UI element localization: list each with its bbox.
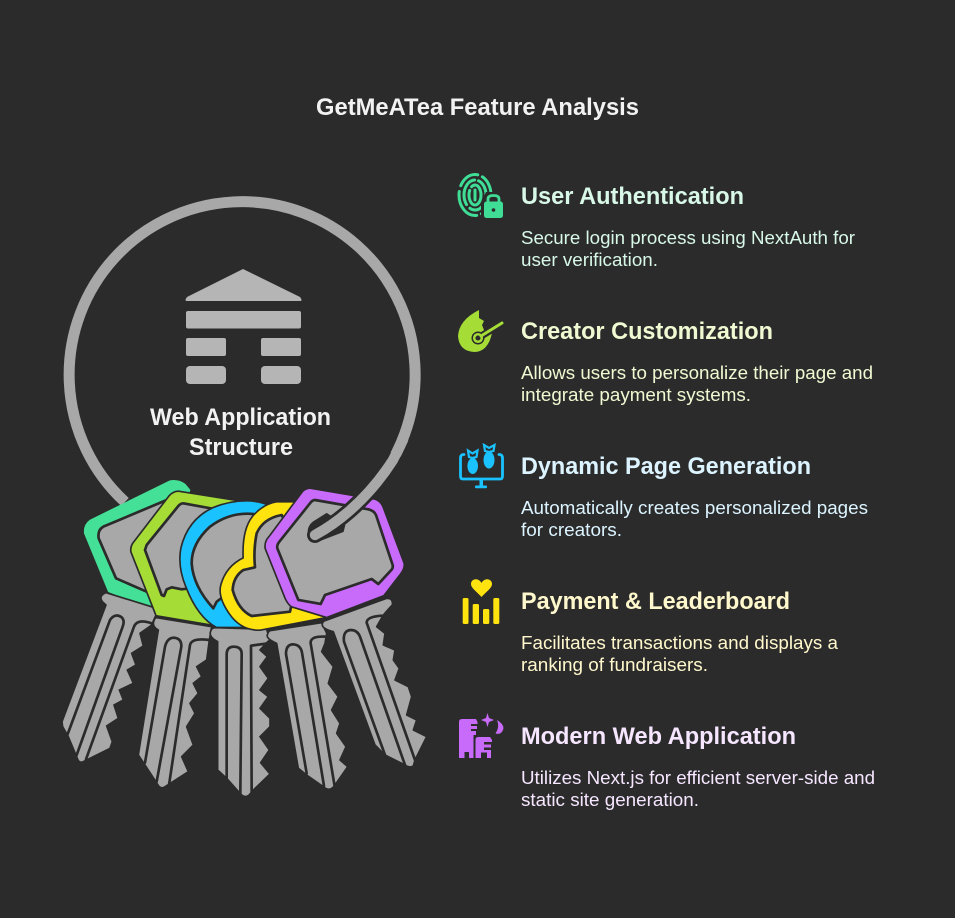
icon: web application structure xyxy=(186,269,302,384)
description: Automatically creates personalized pages xyxy=(521,498,868,518)
icon: heart over bars xyxy=(463,579,499,624)
purple tag xyxy=(266,489,403,617)
icon: monitor with bombs xyxy=(460,445,502,488)
icon: fingerprint lock xyxy=(459,174,506,219)
heading: Modern Web Application xyxy=(521,723,796,750)
central label: Web Application xyxy=(150,404,331,431)
description xyxy=(521,633,839,675)
green tag xyxy=(84,480,190,608)
key 1 xyxy=(62,593,157,762)
heading: Creator Customization xyxy=(521,318,773,345)
key 4 xyxy=(267,623,348,789)
blue tag xyxy=(181,502,272,627)
key bunch illustration xyxy=(62,440,427,797)
description: Secure login process using NextAuth for xyxy=(521,228,855,248)
central label xyxy=(150,404,331,461)
description: user verification. xyxy=(521,250,658,270)
description xyxy=(521,768,875,810)
icon: city buildings at night xyxy=(459,713,503,758)
key 5 xyxy=(322,598,427,767)
icon: paint brush xyxy=(458,310,502,352)
heading: Payment & Leaderboard xyxy=(521,588,790,615)
description: integrate payment systems. xyxy=(521,385,751,405)
yellow tag xyxy=(221,503,327,629)
key 2 xyxy=(138,618,212,788)
description xyxy=(521,228,855,270)
description: static site generation. xyxy=(521,790,699,810)
lime tag xyxy=(132,492,235,624)
description: Facilitates transactions and displays a xyxy=(521,633,839,653)
description: Allows users to personalize their page and xyxy=(521,363,873,383)
description xyxy=(521,363,873,405)
description: ranking of fundraisers. xyxy=(521,655,708,675)
feature: creator customization xyxy=(458,310,873,405)
feature: user authentication xyxy=(459,174,855,270)
ring end through purple tag xyxy=(315,440,403,535)
key 3 xyxy=(210,628,270,797)
central label: Structure xyxy=(189,434,293,461)
feature: dynamic page generation xyxy=(460,445,868,540)
description: Utilizes Next.js for efficient server-side and xyxy=(521,768,875,788)
description xyxy=(521,498,868,540)
feature: modern web application xyxy=(459,713,875,810)
description: for creators. xyxy=(521,520,622,540)
key ring xyxy=(69,202,415,502)
heading: User Authentication xyxy=(521,183,744,210)
heading: Dynamic Page Generation xyxy=(521,453,811,480)
title: GetMeATea Feature Analysis xyxy=(316,94,639,121)
feature: payment and leaderboard xyxy=(463,579,839,675)
